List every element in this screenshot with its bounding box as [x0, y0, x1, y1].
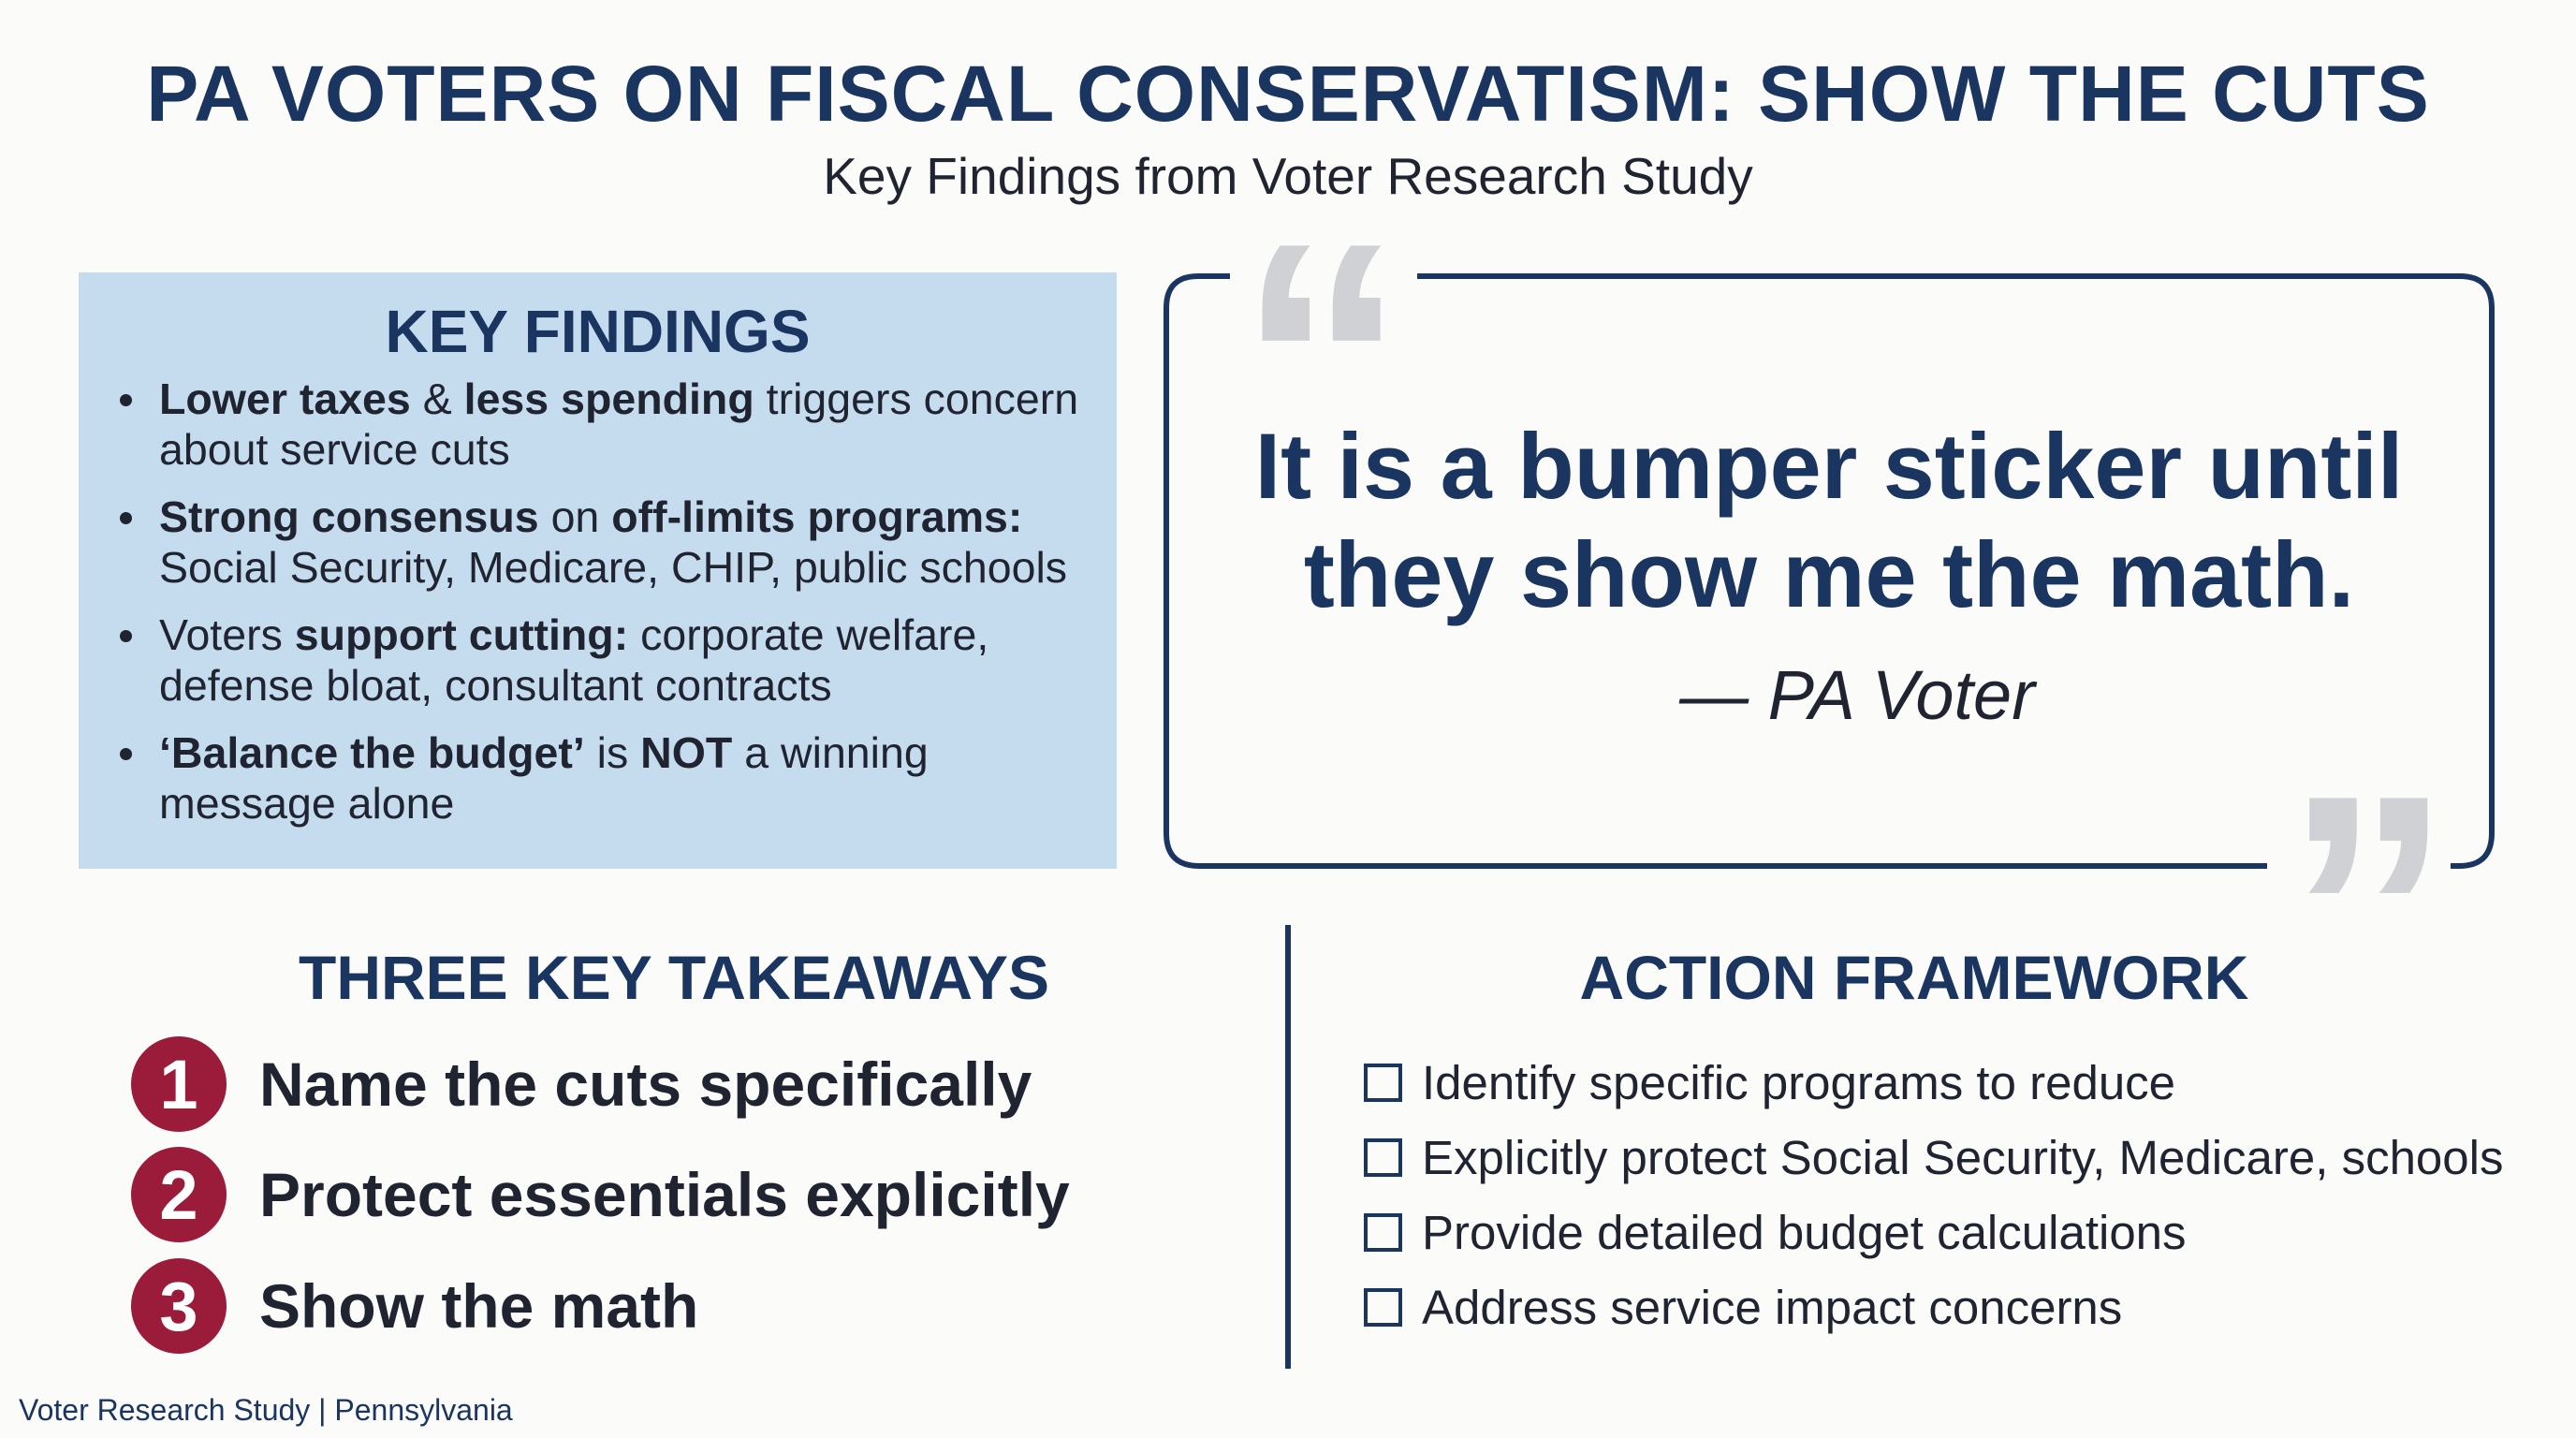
- bullet list: Strong consensus on off-limits programs: Social Security, Medicare, CHIP, public schools: [159, 492, 1067, 592]
- icon: open quote: “: [1237, 173, 1406, 550]
- checklist item 1: Identify specific programs to reduce: [1422, 1056, 2175, 1108]
- takeaway 3: 3: [159, 1268, 198, 1344]
- takeaway 3: [131, 1258, 698, 1354]
- bullet list: [120, 374, 1078, 828]
- subtitle: Key Findings from Voter Research Study: [823, 147, 1753, 205]
- bullet list: Lower taxes & less spending triggers concern about service cuts: [159, 374, 1078, 474]
- title: PA VOTERS ON FISCAL CONSERVATISM: SHOW THE CUTS: [146, 50, 2430, 138]
- takeaway 2: 2: [159, 1155, 198, 1234]
- heading: action framework: ACTION FRAMEWORK: [1580, 943, 2248, 1012]
- bullet list: Voters support cutting: corporate welfare, defense bloat, consultant contracts: [159, 610, 988, 710]
- takeaway 3: Show the math: [259, 1271, 698, 1341]
- takeaway 1: Name the cuts specifically: [259, 1049, 1032, 1119]
- takeaway 1: [131, 1036, 1032, 1132]
- checklist item 3: Provide detailed budget calculations: [1422, 1206, 2187, 1258]
- bullet list: ‘Balance the budget’ is NOT a winning message alone: [159, 728, 929, 828]
- quote text: they show me the math.: [1304, 522, 2354, 626]
- heading: three key takeaways: THREE KEY TAKEAWAYS: [299, 943, 1049, 1012]
- takeaway 2: [131, 1147, 1070, 1242]
- heading: key findings: KEY FINDINGS: [386, 298, 811, 365]
- takeaway 2: Protect essentials explicitly: [259, 1160, 1070, 1229]
- panel: key findings: [79, 272, 1117, 869]
- quote text: [1255, 414, 2403, 626]
- icon: close quote: ”: [2284, 726, 2452, 1102]
- checklist item 4: Address service impact concerns: [1422, 1281, 2122, 1333]
- checklist item 2: Explicitly protect Social Security, Medicare, schools: [1422, 1131, 2503, 1183]
- footer: Voter Research Study | Pennsylvania: [19, 1393, 513, 1427]
- attribution: — PA Voter: [1679, 656, 2035, 734]
- takeaway 1: 1: [159, 1045, 198, 1123]
- quote text: It is a bumper sticker until: [1255, 414, 2403, 518]
